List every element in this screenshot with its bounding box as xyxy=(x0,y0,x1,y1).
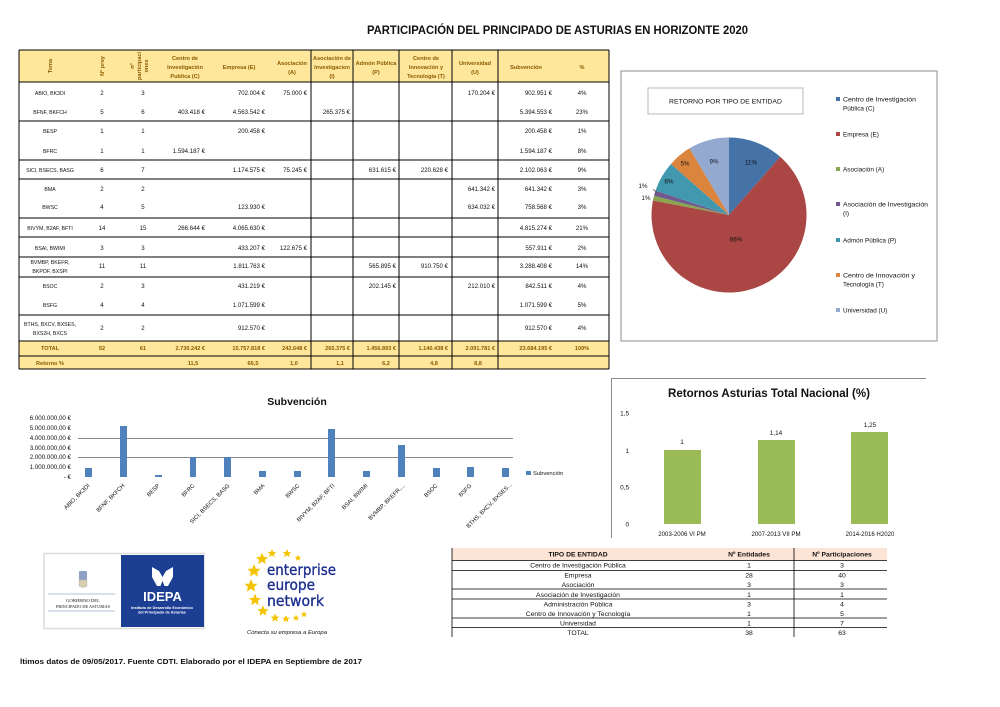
table return percentage row: 1,0 xyxy=(290,361,298,367)
table body rows: 5 xyxy=(141,204,145,211)
y axis labels: - € xyxy=(64,474,72,481)
table body rows: BSOC xyxy=(43,284,58,290)
table header xyxy=(48,52,585,80)
table body rows: 6 xyxy=(100,167,104,174)
table body rows: 6 xyxy=(141,109,145,116)
table total row: 100% xyxy=(575,346,589,352)
table body rows: 5 xyxy=(100,109,104,116)
summary table rows: 1 xyxy=(747,592,751,599)
return chart x axis labels: 2014-2016 H2020 xyxy=(846,531,895,538)
panel: entity summary table xyxy=(452,548,887,637)
table body rows: 4.815.274 € xyxy=(520,225,553,232)
y axis labels xyxy=(30,415,72,481)
table body rows xyxy=(24,90,589,337)
logo: enterprise europe network xyxy=(245,550,336,636)
table header: (P) xyxy=(372,70,380,76)
return chart x axis labels: 2003-2006 VI PM xyxy=(658,531,706,538)
summary table header xyxy=(548,552,872,558)
table body rows: 912.570 € xyxy=(238,325,266,332)
table return percentage row: 6,2 xyxy=(382,361,390,367)
table body rows: BXS2H, BXCS xyxy=(33,331,68,337)
x axis labels: BMA xyxy=(253,483,267,496)
table body rows: BFRC xyxy=(43,149,57,155)
table body rows: BTHS, BXCV, BXSES, xyxy=(24,322,76,328)
y axis labels: 2.000.000,00 € xyxy=(30,454,72,461)
pie slices: 6% xyxy=(665,178,674,186)
logo: Gobierno del Principado de Asturias and IDEPA: Instituto de Desarrollo Económico xyxy=(131,606,194,610)
summary table rows: Universidad xyxy=(560,620,596,628)
logo wordmark: enterprise xyxy=(267,561,336,579)
logo: Gobierno del Principado de Asturias and IDEPA: GOBIERNO DEL xyxy=(66,598,100,603)
table body rows: 1.594.187 € xyxy=(173,148,206,155)
table body rows: 641.342 € xyxy=(468,186,496,193)
table body rows: 265.375 € xyxy=(323,109,351,116)
logo: Gobierno del Principado de Asturias and IDEPA: PRINCIPADO DE ASTURIAS xyxy=(56,604,111,609)
pie legend: Pública (C) xyxy=(843,106,875,112)
table body rows: 2 xyxy=(100,325,104,332)
logo: Gobierno del Principado de Asturias and IDEPA: del Principado de Asturias xyxy=(138,610,186,614)
pie title box xyxy=(648,88,803,114)
table header: Centro de xyxy=(172,56,198,62)
summary table rows: 28 xyxy=(745,572,753,580)
crest icon xyxy=(79,571,87,588)
table body rows: 2 xyxy=(100,90,104,97)
table header: Nº proy xyxy=(100,55,106,76)
x axis labels: BSFG xyxy=(458,483,474,499)
table body rows: 2.102.063 € xyxy=(520,167,553,174)
x axis labels: ABIO, BK3DI xyxy=(63,483,92,511)
table body rows: 7 xyxy=(141,167,145,174)
logo wordmark: europe xyxy=(267,576,315,594)
table body rows: 220.628 € xyxy=(421,167,449,174)
x axis labels: BSOC xyxy=(424,483,439,499)
pie legend: Admón Pública (P) xyxy=(843,238,896,244)
return chart x axis labels: 2007-2013 VII PM xyxy=(751,531,801,538)
return chart title: Retornos Asturias Total Nacional (%) xyxy=(668,388,870,400)
return chart data labels xyxy=(680,422,877,446)
table header: (U) xyxy=(471,70,479,76)
return chart y axis: 0 xyxy=(625,522,629,528)
x axis labels: BSAI, BWIMI xyxy=(341,483,370,511)
logo: Gobierno del Principado de Asturias and IDEPA: IDEPA xyxy=(143,589,182,604)
table body rows: 1.811.763 € xyxy=(233,263,266,270)
table total row: 242.648 € xyxy=(282,346,308,352)
x axis labels: BIVYM, B2AF, BFTI xyxy=(296,483,337,523)
footer source note: ltimos datos de 09/05/2017. Fuente CDTI. Elaborado por el IDEPA en Septiembre de 2017 xyxy=(20,657,362,666)
table body rows: 266.644 € xyxy=(178,225,206,232)
x axis labels: BESP xyxy=(146,483,162,498)
return chart y axis: 1,5 xyxy=(620,410,629,418)
table return percentage row: 8,8 xyxy=(474,361,482,367)
table body rows: 1.071.599 € xyxy=(520,302,553,309)
table body rows: 75.000 € xyxy=(283,90,308,97)
summary table rows: 1 xyxy=(840,592,844,599)
panel: Subvención bar chart xyxy=(30,396,563,530)
return chart y axis: 0,5 xyxy=(620,484,629,492)
table body rows: 1.071.599 € xyxy=(233,302,266,309)
summary table rows: 3 xyxy=(840,582,844,589)
summary table rows: Centro de Investigación Pública xyxy=(530,562,626,570)
table body rows: BVMBP, BKEFR, xyxy=(30,260,70,266)
table body rows: 14% xyxy=(576,263,589,270)
table header: Tema xyxy=(48,58,54,73)
pie legend: Universidad (U) xyxy=(843,308,887,314)
table body rows: 2% xyxy=(578,245,587,252)
table body rows: 4 xyxy=(100,204,104,211)
table return percentage row xyxy=(36,361,482,367)
summary table rows: TOTAL xyxy=(567,630,589,637)
table body rows: 634.032 € xyxy=(468,204,496,211)
table body rows: 4.065.630 € xyxy=(233,225,266,232)
table total row: 15.757.818 € xyxy=(232,346,266,352)
table header: Publica (C) xyxy=(170,74,200,80)
table body rows: 1 xyxy=(141,128,145,135)
table header: Tecnología (T) xyxy=(407,74,445,80)
y axis labels: 5.000.000,00 € xyxy=(30,425,72,432)
return chart y axis: 1 xyxy=(625,448,629,455)
table body rows: 2 xyxy=(100,283,104,290)
table body rows: 4 xyxy=(100,302,104,309)
pie slices xyxy=(639,137,807,293)
panel: Retornos Asturias bar chart xyxy=(612,378,926,538)
x axis labels xyxy=(63,482,514,530)
table header: % xyxy=(580,65,585,71)
x axis labels: BFNF, BKFCH xyxy=(96,483,126,514)
table body rows: 200.458 € xyxy=(238,128,266,135)
logo wordmark xyxy=(267,561,336,610)
return chart bars xyxy=(664,432,888,524)
summary table rows: Administración Pública xyxy=(544,602,613,608)
summary table rows: 3 xyxy=(840,562,844,570)
pie title box: RETORNO POR TIPO DE ENTIDAD xyxy=(669,98,782,106)
table total row: 52 xyxy=(99,346,105,352)
bars xyxy=(85,426,509,477)
pie legend: (I) xyxy=(843,210,849,218)
pie legend xyxy=(836,96,928,314)
summary table rows: 40 xyxy=(838,572,846,580)
summary table rows: 63 xyxy=(838,630,846,637)
table return percentage row: 4,8 xyxy=(430,361,438,367)
return chart data labels: 1,14 xyxy=(770,430,783,437)
table header: (A) xyxy=(288,70,296,76)
table body rows: BKPOF, BXSPI xyxy=(32,269,68,275)
table body rows: 702.004 € xyxy=(238,90,266,97)
table total row: 61 xyxy=(140,346,146,352)
x axis labels: BVMBP, BKEFR,... xyxy=(368,483,407,522)
table body rows: 15 xyxy=(140,225,147,232)
summary table rows: 38 xyxy=(745,630,753,637)
panel: pie chart return by entity type xyxy=(621,71,937,341)
table body rows: 1.594.187 € xyxy=(520,148,553,155)
table body rows: 1 xyxy=(141,148,145,155)
table body rows: 1 xyxy=(100,148,104,155)
pie slices: 11% xyxy=(745,160,757,166)
table header: Asociación de xyxy=(313,56,351,62)
table body rows: BESP xyxy=(43,129,57,135)
pie slices: 1% xyxy=(642,195,651,202)
IDEPA symbol icon xyxy=(152,567,173,586)
table body rows: 631.615 € xyxy=(369,167,397,174)
table total row: 2.730.242 € xyxy=(175,346,206,352)
table body rows: 4% xyxy=(578,90,587,97)
summary table header: Nº Entidades xyxy=(728,552,770,558)
table header: Universidad xyxy=(459,61,492,67)
table body rows: 758.568 € xyxy=(525,204,553,211)
table body rows: 1 xyxy=(100,128,104,135)
table body rows: 11 xyxy=(99,263,106,270)
x axis labels: BWSC xyxy=(285,483,301,500)
table body rows: 431.219 € xyxy=(238,283,266,290)
return chart data labels: 1,25 xyxy=(864,422,877,429)
logo stars xyxy=(245,550,307,622)
table body rows: 3 xyxy=(100,245,104,252)
y axis labels: 1.000.000,00 € xyxy=(30,464,72,471)
bar chart title: Subvención xyxy=(267,396,327,408)
table body rows: 21% xyxy=(576,225,589,232)
pie slices: 66% xyxy=(730,236,743,244)
table header: Innovación y xyxy=(409,65,444,71)
table body rows: 11 xyxy=(140,263,147,270)
table body rows: BSFG xyxy=(43,303,57,309)
table body rows: 202.145 € xyxy=(369,283,397,290)
table body rows: BWSC xyxy=(42,205,58,211)
table body rows: 122.675 € xyxy=(280,245,308,252)
table body rows: 14 xyxy=(99,225,106,232)
table return percentage row: 1,1 xyxy=(336,361,344,367)
table body rows: 557.911 € xyxy=(525,245,553,252)
x axis labels: SICI, BSECS, BASG xyxy=(189,483,232,525)
table total row xyxy=(41,346,589,352)
summary table rows: Asociación de Investigación xyxy=(536,592,620,599)
logo: Gobierno del Principado de Asturias and IDEPA xyxy=(44,554,204,628)
table body rows: 4 xyxy=(141,302,145,309)
pie slices: 9% xyxy=(710,158,719,166)
table body rows: 3.288.408 € xyxy=(520,263,553,270)
table body rows: 2 xyxy=(141,186,145,193)
table body rows: 2 xyxy=(100,186,104,193)
summary table rows: 3 xyxy=(747,602,751,608)
table body rows: 9% xyxy=(578,167,587,174)
table body rows: 641.342 € xyxy=(525,186,553,193)
pie slices: 1% xyxy=(639,183,648,190)
table body rows: 5.394.553 € xyxy=(520,109,553,116)
table body rows: 200.458 € xyxy=(525,128,553,135)
table body rows: ABIO, BK3DI xyxy=(35,91,65,97)
table total row: 265.375 € xyxy=(325,346,351,352)
table body rows: 3% xyxy=(578,186,587,193)
table body rows: 912.570 € xyxy=(525,325,553,332)
table body rows: 433.207 € xyxy=(238,245,266,252)
table header: (I) xyxy=(329,74,335,80)
table header: ones xyxy=(144,59,150,73)
table body rows: 1% xyxy=(578,128,587,135)
table body rows: 5% xyxy=(578,302,587,309)
summary table rows: 1 xyxy=(747,611,751,618)
y axis labels: 3.000.000,00 € xyxy=(30,445,72,452)
table return percentage row: Retorno % xyxy=(36,361,64,367)
table total row: 2.091.781 € xyxy=(465,346,496,352)
summary table rows xyxy=(526,562,846,637)
summary table rows: 7 xyxy=(840,620,844,628)
x axis labels: BTHS, BXCV, BXSES... xyxy=(466,482,514,530)
table body rows: 2 xyxy=(141,325,145,332)
table body rows: 8% xyxy=(578,148,587,155)
table header: Asociación xyxy=(277,61,308,67)
summary table rows: Asociación xyxy=(562,582,595,589)
summary table header: TIPO DE ENTIDAD xyxy=(548,552,608,558)
pie legend: Asociación (A) xyxy=(843,166,884,174)
summary table rows: 1 xyxy=(747,562,751,570)
panel: main data table xyxy=(19,50,609,369)
summary table rows: Centro de Innovación y Tecnología xyxy=(526,611,630,618)
summary table rows: 4 xyxy=(840,602,844,608)
table body rows: SICI, BSECS, BASG xyxy=(26,168,74,174)
pie legend: Centro de Investigación xyxy=(843,96,916,104)
table total row: 1.456.893 € xyxy=(366,346,397,352)
table return percentage row: 11,5 xyxy=(188,361,198,367)
y axis labels: 6.000.000,00 € xyxy=(30,415,72,422)
table total row: 23.684.195 € xyxy=(519,346,553,352)
table header: Investigacion xyxy=(314,65,350,71)
table body rows: 902.951 € xyxy=(525,90,553,97)
table body rows: BMA xyxy=(44,187,56,193)
logo tagline: Conecta su empresa a Europa xyxy=(247,630,328,636)
return chart x axis labels xyxy=(658,531,895,538)
table header: Investigación xyxy=(167,65,203,71)
summary table rows: Empresa xyxy=(564,572,592,580)
return chart data labels: 1 xyxy=(680,439,684,446)
table body rows: 75.245 € xyxy=(283,167,308,174)
table body rows: 3 xyxy=(141,283,145,290)
pie slices: 5% xyxy=(681,160,690,168)
table body rows: 1.174.575 € xyxy=(233,167,266,174)
bar chart legend: Subvención xyxy=(533,471,563,477)
pie legend: Centro de Innovación y xyxy=(843,272,916,280)
table body rows: 4.563.542 € xyxy=(233,109,266,116)
table header: participaci xyxy=(137,52,143,80)
table body rows: 403.418 € xyxy=(178,109,206,116)
table body rows: 565.895 € xyxy=(369,263,397,270)
table total row: 1.140.438 € xyxy=(418,346,449,352)
summary table header: Nº Participaciones xyxy=(812,552,872,558)
table body rows: 4% xyxy=(578,325,587,332)
table header: Centro de xyxy=(413,56,439,62)
table header: Admón Pública xyxy=(356,61,397,67)
logo wordmark: network xyxy=(267,592,324,610)
y axis labels: 4.000.000,00 € xyxy=(30,435,72,442)
summary table rows: 3 xyxy=(747,582,751,589)
table body rows: 212.010 € xyxy=(468,283,496,290)
table body rows: 910.750 € xyxy=(421,263,449,270)
table body rows: BSAI, BWIMI xyxy=(35,246,65,252)
summary table rows: 5 xyxy=(840,611,844,618)
table body rows: 3 xyxy=(141,245,145,252)
table return percentage row: 66,5 xyxy=(248,361,258,367)
pie legend: Tecnología (T) xyxy=(843,282,884,288)
table body rows: 23% xyxy=(576,109,589,116)
table body rows: BFNF, BKFCH xyxy=(33,110,67,116)
pie legend: Asociación de Investigación xyxy=(843,202,928,208)
return chart y axis xyxy=(620,410,629,528)
table body rows: 170.204 € xyxy=(468,90,496,97)
table body rows: 4% xyxy=(578,283,587,290)
table header: Empresa (E) xyxy=(223,65,255,71)
table header: Subvención xyxy=(510,65,542,71)
table body rows: 3% xyxy=(578,204,587,211)
table body rows: BIVYM, B2AF, BFTI xyxy=(27,226,73,232)
table total row: TOTAL xyxy=(41,346,60,352)
table body rows: 842.511 € xyxy=(525,283,553,290)
table body rows: 123.930 € xyxy=(238,204,266,211)
summary table rows: 1 xyxy=(747,620,751,628)
x axis labels: BFRC xyxy=(181,483,196,499)
table body rows: 3 xyxy=(141,90,145,97)
table header: nº xyxy=(130,63,136,69)
pie legend: Empresa (E) xyxy=(843,132,879,138)
title: PARTICIPACIÓN DEL PRINCIPADO DE ASTURIAS EN HORIZONTE 2020 xyxy=(367,24,748,37)
